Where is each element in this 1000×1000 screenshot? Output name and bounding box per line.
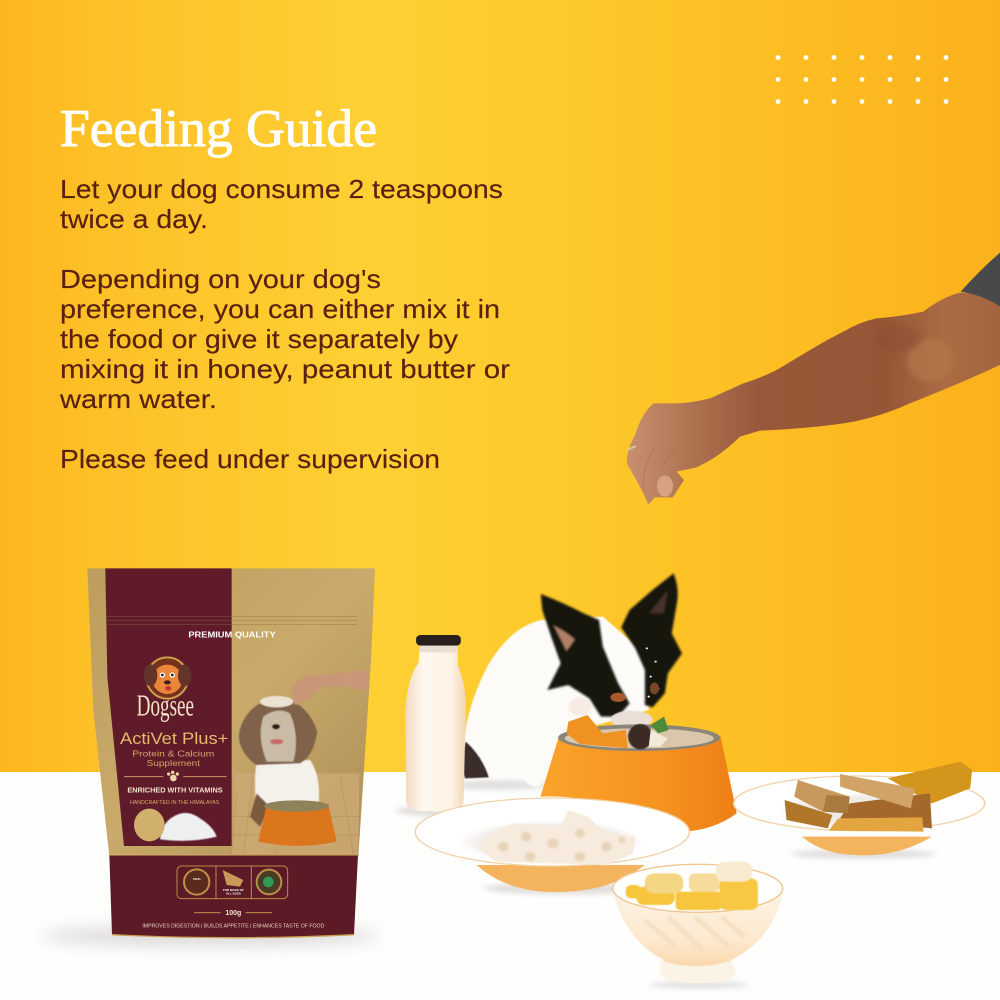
shredded texture <box>498 829 625 861</box>
maroon front panel <box>105 568 232 846</box>
feeding instructions text <box>59 174 510 474</box>
chew: top <box>840 774 915 808</box>
wood floor <box>232 773 360 854</box>
gold seal <box>134 809 165 841</box>
powder pile <box>160 813 217 841</box>
dog right tan mark <box>650 682 659 694</box>
dog tan eyebrow <box>610 693 626 702</box>
arm reaching down with hand <box>627 253 1000 504</box>
tucked finger <box>657 475 673 497</box>
handcrafted label: HANDCRAFTED IN THE HIMALAYAS <box>130 800 220 806</box>
sleeve <box>961 253 1000 307</box>
bowl food <box>566 715 628 748</box>
product pack: Dogsee ActiVet Plus <box>87 568 375 938</box>
chew: lower left <box>785 800 832 828</box>
enriched label: ENRICHED WITH VITAMINS <box>127 788 223 795</box>
dog ear inner <box>553 625 575 652</box>
milk bottle <box>405 635 466 811</box>
feeding instructions text: mixing it in honey, peanut butter or <box>60 354 510 384</box>
title: Feeding Guide <box>60 100 377 158</box>
dog body <box>463 617 649 787</box>
supplement descriptor: Protein & Calcium <box>132 749 214 759</box>
feeding instructions text: twice a day. <box>60 204 208 234</box>
maroon base band <box>109 855 358 938</box>
pack dog ears and head <box>239 697 317 765</box>
product name: ActiVet Plus+ <box>120 729 228 748</box>
finger lines <box>643 447 677 490</box>
weight: 100g <box>225 910 241 917</box>
plate: shredded chicken <box>415 798 689 892</box>
feeding instructions text: Please feed under supervision <box>60 444 440 474</box>
front paw <box>568 697 591 716</box>
white table surface <box>0 772 1000 1000</box>
feeding instructions text: Depending on your dog's <box>60 264 381 294</box>
forearm and hand <box>627 293 1000 504</box>
badges box <box>177 866 288 899</box>
chew: back yellow bar <box>888 762 972 803</box>
fur speckles <box>646 647 659 698</box>
dog muzzle <box>610 711 653 728</box>
orange dog bowl <box>540 715 737 832</box>
background gradient <box>0 0 1000 772</box>
pack dog face <box>261 711 296 762</box>
dog head black markings <box>541 573 682 717</box>
feeding instructions text: warm water. <box>59 384 217 414</box>
plate: yak chews <box>734 762 985 855</box>
badges box: ALL AGES <box>226 892 241 896</box>
divider with paw <box>124 771 227 781</box>
bowl on pack <box>258 800 337 846</box>
seal lines <box>107 617 357 625</box>
feeding instructions text: Let your dog consume 2 teaspoons <box>60 174 503 204</box>
right ear inner <box>649 590 668 613</box>
weight <box>194 910 272 917</box>
cup with cheese cubes <box>613 862 783 983</box>
pack benefits line: IMPROVES DIGESTION | BUILDS APPETITE | ENHANCES TASTE OF FOOD <box>142 923 324 929</box>
pack hand <box>291 670 369 705</box>
pack dog leg <box>250 793 270 827</box>
chew: front <box>829 817 923 832</box>
product pack shadow <box>40 926 380 946</box>
badges box: FOR DOGS OF <box>223 888 244 892</box>
feeding instructions text: preference, you can either mix it in <box>60 294 500 324</box>
badges box: 100% <box>193 877 201 881</box>
decorative dot grid <box>776 55 948 104</box>
pack dog chest <box>255 760 319 813</box>
elbow highlight <box>907 338 953 382</box>
pack dog treat on head <box>260 696 293 707</box>
ring <box>627 446 636 450</box>
chew: middle dark <box>840 793 932 828</box>
elbow shadow <box>875 325 922 352</box>
dog photo on pack <box>239 670 369 827</box>
Dogsee logo medallion <box>144 657 191 699</box>
feeding instructions text: the food or give it separately by <box>60 324 458 354</box>
table scene: dog, bottle, bowls <box>396 573 985 988</box>
product pack: Dogsee ActiVet Plus: Supplement <box>147 758 201 768</box>
pack gold body <box>87 568 375 857</box>
dog hind leg <box>462 742 489 778</box>
chew: upper left <box>794 780 850 813</box>
premium quality label: PREMIUM QUALITY <box>188 631 276 640</box>
brand name: Dogsee <box>137 689 194 723</box>
table shadows <box>396 780 936 988</box>
